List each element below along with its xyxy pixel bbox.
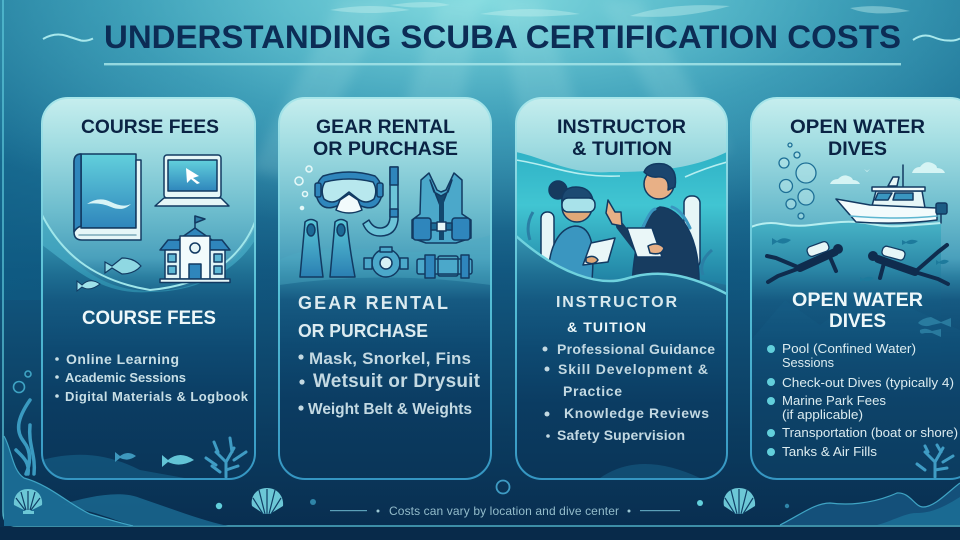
heading: COURSE FEES (81, 116, 219, 138)
heading repeat: COURSE FEES (82, 308, 216, 329)
list: instructor items: Safety Supervision (557, 427, 685, 443)
list: course items: Academic Sessions (65, 370, 186, 385)
list: instructor items: Skill Development & (558, 361, 708, 377)
icon: BCD vest (412, 173, 471, 243)
title: UNDERSTANDING SCUBA CERTIFICATION COSTS (104, 19, 901, 55)
seabed right (780, 483, 960, 525)
list: gear items: Weight Belt & Weights (308, 401, 472, 418)
panel: course fees (42, 98, 255, 480)
list: gear items (298, 349, 481, 418)
panel: gear rental or purchase (279, 98, 491, 479)
seabed left (4, 400, 228, 526)
icon: instructor (606, 164, 700, 285)
list: dive items (767, 341, 958, 459)
icon: fish (77, 258, 141, 291)
heading: INSTRUCTOR (557, 116, 686, 138)
list: gear items: Mask, Snorkel, Fins (309, 349, 471, 368)
subheading (298, 293, 448, 341)
subheading: GEAR RENTAL (298, 293, 448, 313)
subheading: OPEN WATER (792, 290, 923, 311)
list: instructor items: Knowledge Reviews (564, 405, 709, 421)
list: instructor items: Practice (563, 383, 622, 399)
icon: divers (767, 241, 948, 284)
list: dive items: (if applicable) (782, 407, 863, 422)
icon: bubbles (295, 166, 312, 210)
list: course items: Digital Materials & Logbook (65, 389, 249, 404)
heading: GEAR RENTAL (316, 116, 455, 138)
list: instructor items (542, 341, 715, 443)
icon: bubbles (779, 143, 816, 219)
icon: fish in water (772, 238, 949, 282)
subheading: INSTRUCTOR (556, 294, 677, 311)
icon: snorkel (363, 167, 398, 236)
list: dive items: Tanks & Air Fills (782, 444, 878, 459)
title underline (104, 63, 901, 65)
list: dive items: Pool (Confined Water) (782, 341, 916, 356)
subheading: & TUITION (567, 319, 646, 335)
list: dive items: Sessions (782, 355, 834, 370)
heading: DIVES (828, 138, 887, 160)
icon: coral (917, 445, 953, 477)
subheading (556, 294, 677, 335)
heading: OR PURCHASE (313, 138, 458, 160)
icon: school (160, 216, 230, 282)
icon: student diver (541, 181, 615, 280)
list: dive items: Check-out Dives (typically 4) (782, 375, 954, 390)
icon: clouds (830, 162, 945, 184)
bubbles and dots (14, 371, 789, 509)
title wave right (913, 36, 960, 41)
heading: & TUITION (572, 138, 672, 160)
list: course items: Online Learning (66, 351, 179, 367)
subheading (792, 290, 923, 332)
footer note: Costs can vary by location and dive center (389, 504, 619, 518)
icon: fish small (918, 317, 951, 337)
list: course items (55, 351, 249, 404)
icon: mask (315, 172, 383, 213)
fish and coral (115, 438, 246, 477)
heading (790, 116, 925, 160)
list: gear items: Wetsuit or Drysuit (313, 371, 481, 392)
icon: weight belt (417, 255, 472, 278)
panel: open water dives (751, 98, 960, 480)
subheading: OR PURCHASE (298, 321, 428, 341)
list: instructor items: Professional Guidance (557, 341, 715, 357)
icon: shell left (14, 489, 42, 514)
heading: OPEN WATER (790, 116, 925, 138)
list: dive items: Transportation (boat or shore) (782, 425, 958, 440)
title wave left (43, 35, 93, 41)
icon: book (74, 154, 141, 240)
footer note (330, 504, 680, 518)
subheading: DIVES (829, 311, 886, 332)
panel: instructor and tuition (516, 98, 727, 479)
icon: boat (836, 165, 947, 223)
icon: shell center right (724, 488, 755, 514)
heading (313, 116, 458, 160)
icon: fins (300, 220, 355, 277)
list: dive items: Marine Park Fees (782, 393, 887, 408)
heading (557, 116, 686, 160)
icon: shell center left (252, 488, 283, 514)
lower card wave (516, 236, 727, 478)
icon: laptop (155, 155, 229, 206)
icon: regulator (364, 247, 408, 277)
